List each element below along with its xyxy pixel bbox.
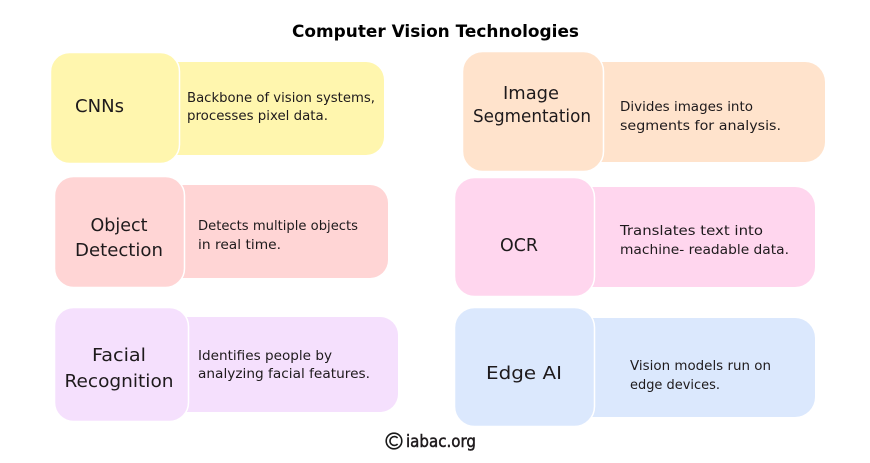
Edge AI heading: Edge AI	[486, 363, 562, 384]
Facial Recognition heading: Facial	[92, 345, 146, 366]
Edge AI description: Vision models run on	[630, 359, 771, 374]
OCR description panel	[553, 187, 815, 287]
OCR description: Translates text into	[619, 224, 763, 239]
Edge AI heading box	[454, 308, 594, 426]
Edge AI description panel	[553, 318, 815, 417]
Facial Recognition heading: Recognition	[64, 371, 174, 392]
Facial Recognition description: analyzing facial features.	[198, 367, 370, 382]
Edge AI description: edge devices.	[630, 378, 720, 393]
Image Segmentation description: Divides images into	[620, 100, 753, 115]
panel: Image Segmentation	[462, 52, 825, 172]
CNNs heading: CNNs	[75, 96, 124, 117]
panel: OCR	[454, 178, 815, 296]
Object Detection description: Detects multiple objects	[198, 219, 358, 234]
Facial Recognition description: Identifies people by	[198, 349, 332, 364]
CNNs description panel	[140, 62, 384, 155]
Image Segmentation heading: Image	[503, 83, 559, 104]
Object Detection description: in real time.	[198, 238, 281, 253]
icon: copyright circle	[386, 433, 402, 449]
Object Detection heading box	[54, 176, 184, 288]
panel: Facial Recognition	[54, 308, 398, 422]
Image Segmentation heading box	[462, 52, 604, 172]
Facial Recognition heading box	[54, 308, 188, 422]
Object Detection heading: Object	[90, 215, 148, 236]
OCR heading: OCR	[500, 235, 538, 256]
Facial Recognition description panel	[148, 317, 398, 412]
CNNs description: processes pixel data.	[187, 109, 328, 124]
CNNs heading box	[50, 52, 180, 164]
OCR description: machine- readable data.	[620, 243, 789, 258]
OCR heading box	[454, 178, 594, 296]
Object Detection description panel	[145, 185, 388, 278]
title: Computer Vision Technologies	[292, 22, 579, 42]
panel: Edge AI	[454, 308, 815, 426]
Image Segmentation heading: Segmentation	[473, 106, 591, 127]
footer: iabac.org logo	[386, 432, 476, 452]
Object Detection heading: Detection	[75, 240, 163, 261]
Image Segmentation description: segments for analysis.	[620, 119, 781, 134]
CNNs description: Backbone of vision systems,	[187, 91, 375, 106]
panel: Object Detection	[54, 176, 388, 288]
Image Segmentation description panel	[562, 62, 825, 162]
panel: CNNs	[50, 52, 384, 164]
footer text: iabac.org	[406, 432, 476, 452]
